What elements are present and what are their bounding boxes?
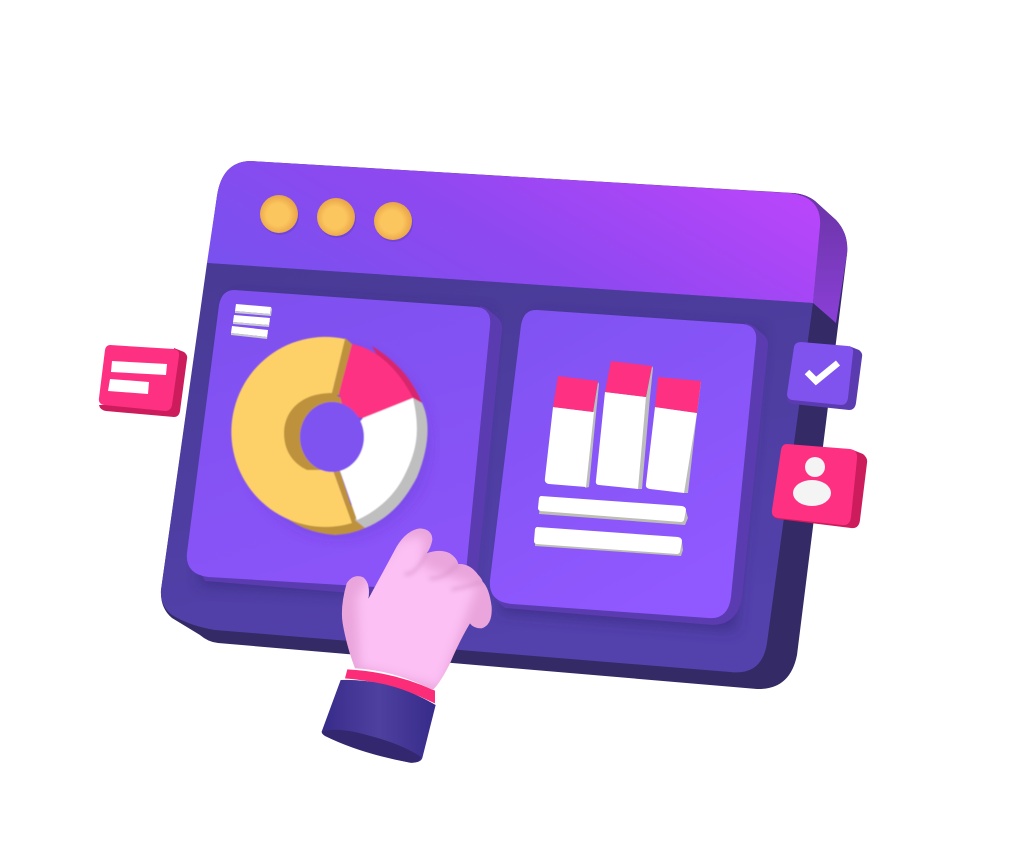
window outer silhouette [161, 161, 847, 689]
chip line 1 [111, 361, 167, 375]
chip side [787, 346, 862, 410]
card bevel [200, 306, 502, 596]
title bar [207, 161, 820, 303]
yellow top edge extrusion [325, 338, 352, 398]
yellow segment [231, 337, 352, 527]
illustration: dashboard window with hand [98, 161, 868, 763]
donut shadow [246, 350, 430, 538]
cuff opening [322, 730, 421, 763]
yellow cut edge [333, 468, 356, 523]
card face [187, 290, 490, 591]
card face [490, 310, 756, 618]
chip: user card [772, 444, 867, 528]
pink segment [339, 344, 413, 418]
cuff [322, 680, 436, 763]
panel drop shadows [197, 572, 745, 634]
text line 1 [538, 496, 688, 525]
bar chart [545, 361, 701, 493]
card bevel [495, 323, 768, 625]
donut chart [231, 337, 430, 538]
yellow segment extrusion [280, 505, 365, 535]
hand [322, 523, 500, 763]
finger creases [406, 553, 482, 589]
text line 2 [534, 527, 683, 556]
chip side [99, 348, 187, 417]
chip side [772, 450, 867, 528]
bar 2 [596, 361, 653, 489]
window [161, 161, 847, 689]
palm and fingers [342, 528, 492, 690]
hamburger icon [231, 304, 272, 339]
donut hole [300, 402, 364, 472]
panel: donut chart card [187, 290, 502, 596]
chip: pink text card [99, 345, 187, 417]
user icon [793, 457, 831, 506]
chip face [99, 345, 179, 411]
chip: check mark card [787, 342, 862, 410]
check icon [807, 363, 838, 381]
pink side [372, 346, 422, 403]
chip line 2 [108, 379, 149, 394]
white segment side [355, 398, 427, 528]
white segment [339, 398, 417, 520]
bar 3 [646, 377, 701, 493]
chip face [787, 342, 853, 405]
window body front [161, 263, 813, 672]
panel: bar chart card [490, 310, 768, 625]
window dots [260, 195, 413, 242]
title bar side bevel [793, 193, 847, 323]
chip face [772, 444, 857, 525]
cuff lining [345, 669, 435, 703]
yellow inner wall [284, 393, 345, 470]
bar 1 [545, 376, 599, 488]
